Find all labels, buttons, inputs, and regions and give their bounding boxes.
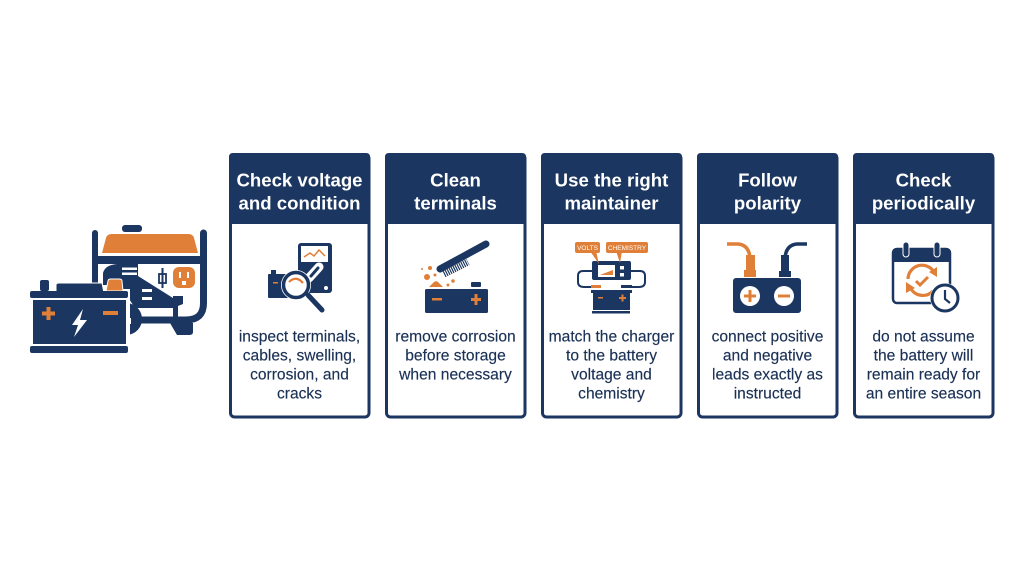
panel: follow polarity [697, 153, 838, 417]
panel: check voltage and condition [229, 153, 370, 417]
icon: battery [27, 279, 130, 355]
icon: brush and battery [421, 244, 488, 313]
panel: use the right maintainer: maintainer [564, 192, 659, 214]
icon: calendar and clock [892, 242, 958, 312]
panel: follow polarity: and negative [723, 348, 812, 364]
panel: clean terminals: before storage [405, 348, 506, 364]
icon: battery with leads [727, 244, 807, 313]
body text: match the charger [549, 328, 674, 346]
panel: clean terminals: terminals [414, 192, 497, 214]
panel: clean terminals [385, 153, 526, 417]
body text: remove corrosion [395, 328, 516, 346]
panel: follow polarity: leads exactly as [712, 366, 823, 384]
panel: clean terminals: when necessary [398, 366, 512, 384]
panel: use the right maintainer: chemistry [578, 386, 645, 402]
body text: do not assume [872, 328, 975, 346]
heading: Check [896, 170, 952, 190]
label: chemistry: CHEMISTRY [608, 245, 647, 252]
panel: use the right maintainer: to the battery [566, 348, 657, 364]
heading: Follow [738, 170, 797, 190]
body text: inspect terminals, [239, 328, 360, 346]
panel: follow polarity: polarity [734, 192, 802, 214]
icon: multimeter and magnifier [268, 243, 332, 310]
panel: check periodically [853, 153, 994, 417]
panel: check voltage and condition: cracks [277, 386, 322, 402]
heading: Check voltage [236, 170, 363, 190]
body text: connect positive [712, 328, 823, 346]
panel: check periodically: the battery will [874, 348, 973, 364]
label: volts: VOLTS [577, 245, 599, 252]
heading: Use the right [555, 170, 668, 190]
panel: check voltage and condition: and condition [239, 192, 360, 214]
icon: generator [92, 225, 207, 335]
icon: generator and battery [27, 225, 207, 355]
panel: check periodically: remain ready for [867, 366, 980, 384]
panel: check voltage and condition: corrosion, and [250, 366, 349, 384]
panel: check periodically: periodically [872, 192, 976, 214]
panel: use the right maintainer [541, 153, 682, 417]
panel: use the right maintainer: voltage and [571, 366, 652, 384]
heading: Clean [430, 170, 481, 190]
panel: check periodically: an entire season [866, 386, 981, 402]
panel: check voltage and condition: cables, swelling, [243, 348, 356, 364]
panel: follow polarity: instructed [734, 386, 801, 402]
icon: charger on battery [575, 242, 648, 314]
